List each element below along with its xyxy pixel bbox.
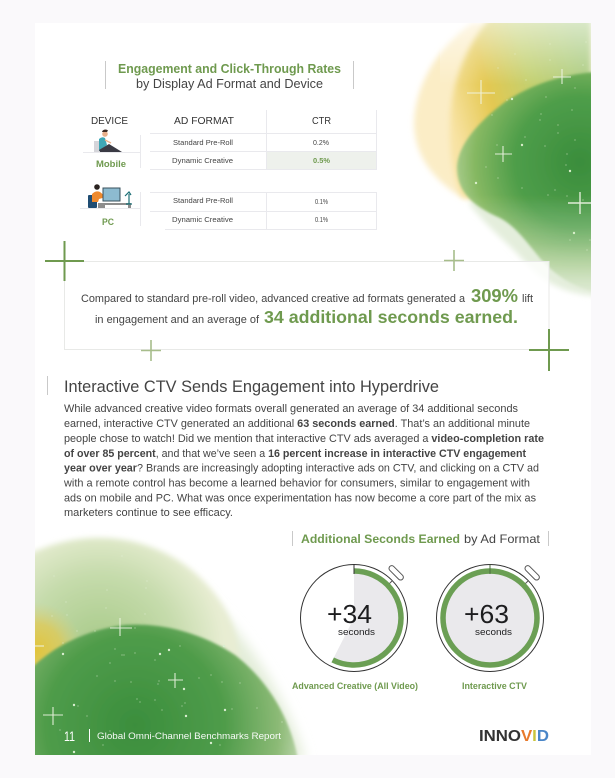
- decorative blob: top right: [414, 18, 600, 296]
- body paragraph: ads on mobile and PC. What was once experimentation has now become a core part of the mix as: [64, 492, 537, 504]
- gray disc: [444, 572, 536, 664]
- chart heading: [292, 531, 548, 546]
- device labels: Mobile: [96, 159, 126, 170]
- clock unit: seconds: [475, 627, 512, 638]
- table rows: 0.2%: [313, 138, 329, 147]
- section heading: Interactive CTV Sends Engagement into Hyperdrive: [64, 378, 439, 396]
- icon: sparkle dots bottom left: [52, 556, 282, 745]
- table rows: Dynamic Creative: [172, 156, 233, 165]
- green progress arc: [333, 571, 401, 665]
- footer page number and report name: 11: [64, 728, 75, 744]
- logo: INNOVID: INNOVID: [479, 728, 549, 745]
- clock label: Interactive CTV: [462, 681, 527, 691]
- table: CTR by device: [80, 110, 376, 230]
- callout text: 309%: [471, 286, 518, 306]
- body paragraph: earned, interactive CTV generated an additional 63 seconds earned. That’s an additional minute: [64, 418, 530, 430]
- clock knob: [523, 565, 540, 586]
- chart: clock +34: [292, 564, 418, 691]
- callout box: [45, 241, 569, 371]
- clock knob: [387, 565, 404, 586]
- table highlight cell: [267, 151, 376, 169]
- chart: clock +63: [436, 564, 544, 691]
- body paragraph: [63, 403, 544, 519]
- icon: small cross top: [444, 250, 464, 271]
- clock label: Advanced Creative (All Video): [292, 681, 418, 691]
- footer page number and report name: [64, 728, 281, 744]
- chart heading: by Ad Format: [464, 532, 541, 546]
- icon: sparkle crosses bottom left: [35, 618, 183, 725]
- clock unit: seconds: [338, 627, 375, 638]
- clock value: +34: [327, 599, 372, 629]
- icon: sparkle crosses top right: [467, 69, 591, 214]
- callout text: [81, 286, 534, 327]
- table rows: 0.1%: [315, 215, 328, 224]
- title: Engagement and Click-Through Rates: [118, 62, 341, 76]
- callout text: lift: [522, 293, 534, 305]
- icon: sparkle dots top right: [486, 42, 590, 250]
- green progress ring: [443, 571, 537, 665]
- body paragraph: While advanced creative video formats overall generated an average of 34 additional seconds: [64, 403, 519, 415]
- title: [106, 61, 354, 91]
- table headers: DEVICE: [91, 115, 128, 127]
- footer page number and report name: Global Omni-Channel Benchmarks Report: [97, 731, 281, 742]
- body paragraph: people chose to watch! Did we mention that interactive CTV ads averaged a video-completion rate: [64, 433, 544, 445]
- table rows: 0.5%: [313, 156, 330, 165]
- table headers: CTR: [312, 115, 331, 127]
- callout text: 34 additional seconds earned.: [264, 307, 518, 327]
- callout text: Compared to standard pre-roll video, advanced creative ad formats generated a: [81, 293, 466, 305]
- icon: person at PC: [88, 184, 132, 208]
- icon: person with mobile: [94, 130, 122, 152]
- table rows: [172, 138, 330, 224]
- table headers: [91, 115, 331, 127]
- table rows: Standard Pre-Roll: [173, 196, 233, 205]
- body paragraph: marketers continue to see efficacy.: [64, 507, 233, 519]
- device labels: PC: [102, 217, 114, 228]
- chart heading: Additional Seconds Earned: [301, 532, 460, 546]
- table rows: Standard Pre-Roll: [173, 138, 233, 147]
- icon: small cross bottom: [141, 340, 161, 361]
- gray sector: [332, 568, 403, 667]
- callout text: in engagement and an average of: [95, 314, 260, 326]
- table rows: Dynamic Creative: [172, 215, 233, 224]
- title: by Display Ad Format and Device: [136, 77, 323, 91]
- icon: large cross bottom-right: [529, 329, 569, 371]
- table rows: 0.1%: [315, 197, 328, 206]
- table headers: AD FORMAT: [174, 115, 235, 127]
- device labels: [96, 159, 126, 228]
- decorative blob: bottom left: [25, 538, 305, 760]
- clock value: +63: [464, 599, 509, 629]
- body paragraph: with a remote control has become a learned behavior for consumers, similar to engagement with: [63, 478, 530, 490]
- body paragraph: year over year? Brands are increasingly adopting interactive ads on CTV, and clicking on a CTV ad: [64, 462, 539, 474]
- body paragraph: of over 85 percent, and that we’ve seen a 16 percent increase in interactive CTV engagement: [64, 448, 526, 460]
- icon: large cross top-left: [45, 241, 84, 281]
